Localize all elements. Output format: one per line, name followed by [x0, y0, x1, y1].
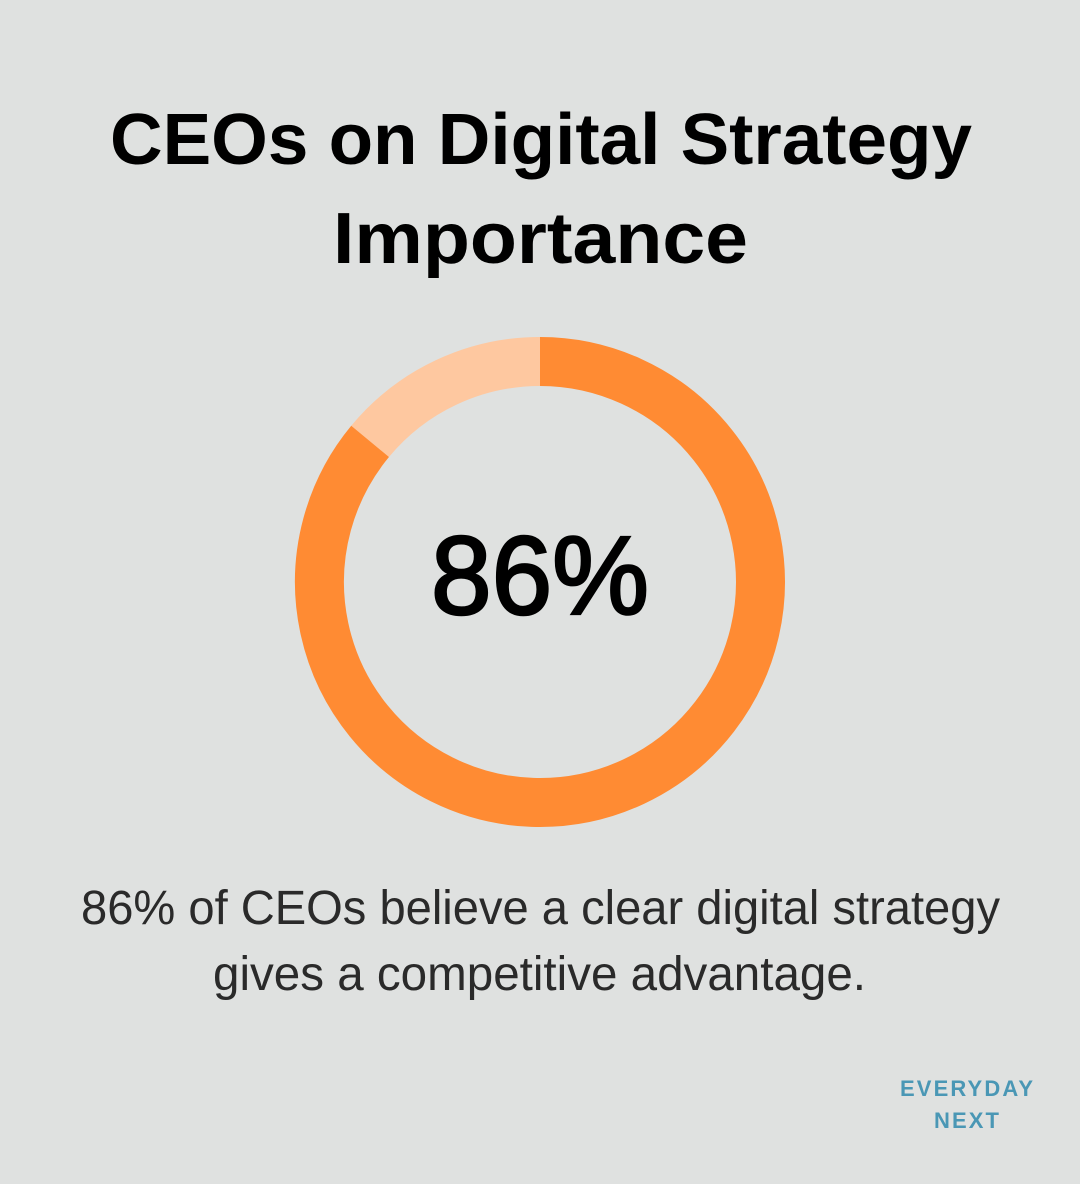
- donut remainder segment: 14 percent: [370, 362, 540, 441]
- brand logo text: NEXT: [934, 1108, 1000, 1133]
- donut value segment: 86 percent: [319, 362, 760, 802]
- description text: 86% of CEOs believe a clear digital strategy: [81, 882, 1000, 935]
- title: CEOs on Digital Strategy: [110, 100, 972, 180]
- description text: [81, 882, 1000, 1001]
- description text: gives a competitive advantage.: [213, 948, 866, 1001]
- brand logo text: [900, 1076, 1033, 1133]
- title: [110, 100, 972, 279]
- title: Importance: [333, 199, 748, 279]
- central statistic: 86%: [431, 514, 649, 638]
- donut chart: 86 percent: [319, 362, 760, 802]
- brand logo text: EVERYDAY: [900, 1076, 1033, 1101]
